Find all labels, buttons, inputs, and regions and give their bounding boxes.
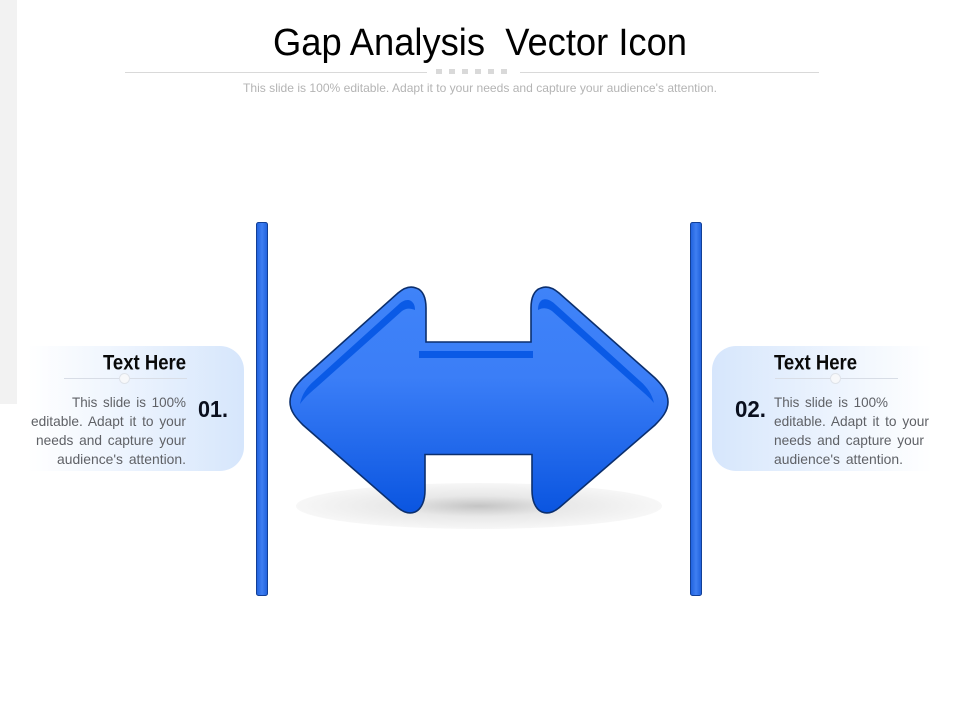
left edge grey panel — [0, 0, 17, 404]
number 02: 02. — [735, 396, 766, 422]
panel: item 01 — [28, 346, 244, 471]
arrow highlight: right head — [538, 299, 654, 403]
description 01: This slide is 100% — [72, 394, 186, 410]
number 01: 01. — [198, 396, 228, 422]
right vertical bar — [690, 222, 702, 596]
arrow shadow — [296, 483, 662, 529]
description 02 — [774, 394, 929, 467]
arrow highlight: shaft bar — [419, 351, 533, 358]
description 02: audience's attention. — [774, 451, 903, 467]
description 01: editable. Adapt it to your — [31, 413, 186, 429]
title divider with dots — [125, 69, 819, 74]
description 02: needs and capture your — [774, 432, 924, 448]
panel: item 02 — [712, 346, 932, 471]
heading rule with dot — [775, 374, 898, 384]
heading 01: Text Here — [103, 352, 186, 374]
description 01: needs and capture your — [36, 432, 186, 448]
description 01: audience's attention. — [57, 451, 186, 467]
title: Gap Analysis Vector Icon — [273, 22, 687, 64]
description 02: editable. Adapt it to your — [774, 413, 929, 429]
left vertical bar — [256, 222, 268, 596]
description 02: This slide is 100% — [774, 394, 888, 410]
heading rule with dot — [64, 374, 187, 384]
icon: double-headed gap arrow — [290, 287, 668, 513]
arrow highlight: left head — [300, 300, 415, 404]
heading 02: Text Here — [774, 352, 857, 374]
subtitle: This slide is 100% editable. Adapt it to your needs and capture your audience's attention. — [243, 81, 717, 95]
description 01 — [31, 394, 186, 467]
